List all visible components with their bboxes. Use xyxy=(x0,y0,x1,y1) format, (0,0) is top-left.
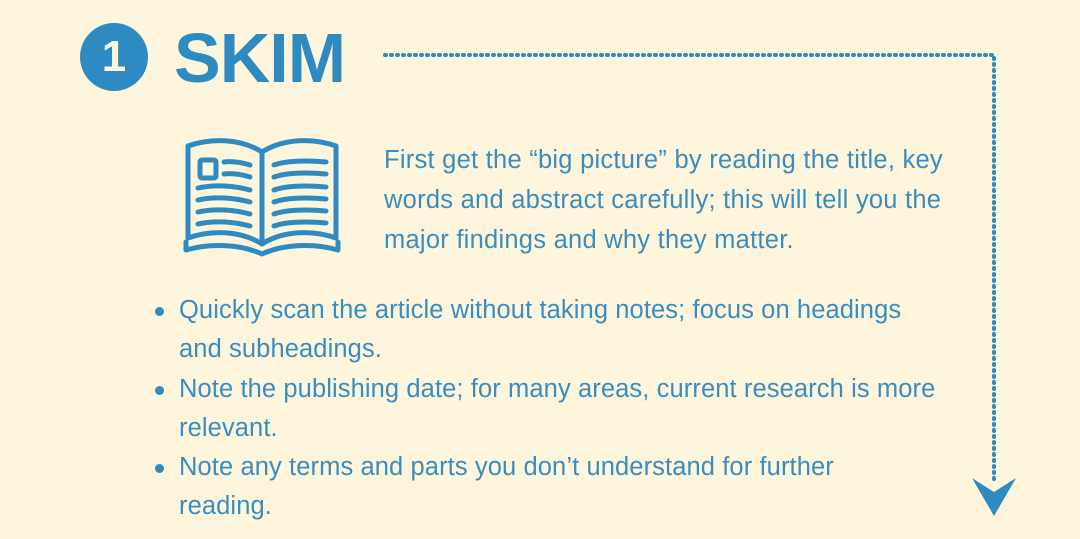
intro text xyxy=(384,146,943,254)
intro text: First get the “big picture” by reading the title, key xyxy=(384,146,943,174)
number badge: 1 xyxy=(102,32,126,81)
intro text: words and abstract carefully; this will tell you the xyxy=(384,186,941,214)
bullet list: relevant. xyxy=(179,414,278,442)
icon: open book xyxy=(184,138,340,256)
intro text: major findings and why they matter. xyxy=(384,226,794,254)
bullet list: and subheadings. xyxy=(179,335,382,363)
bullet list xyxy=(155,296,935,520)
bullet list: Note any terms and parts you don’t understand for further xyxy=(179,453,834,481)
bullet list: Note the publishing date; for many areas, current research is more xyxy=(179,375,935,403)
bullet list: reading. xyxy=(179,492,272,520)
title: SKIM xyxy=(174,19,345,97)
bullet list: Quickly scan the article without taking notes; focus on headings xyxy=(179,296,901,324)
number badge xyxy=(80,23,148,91)
